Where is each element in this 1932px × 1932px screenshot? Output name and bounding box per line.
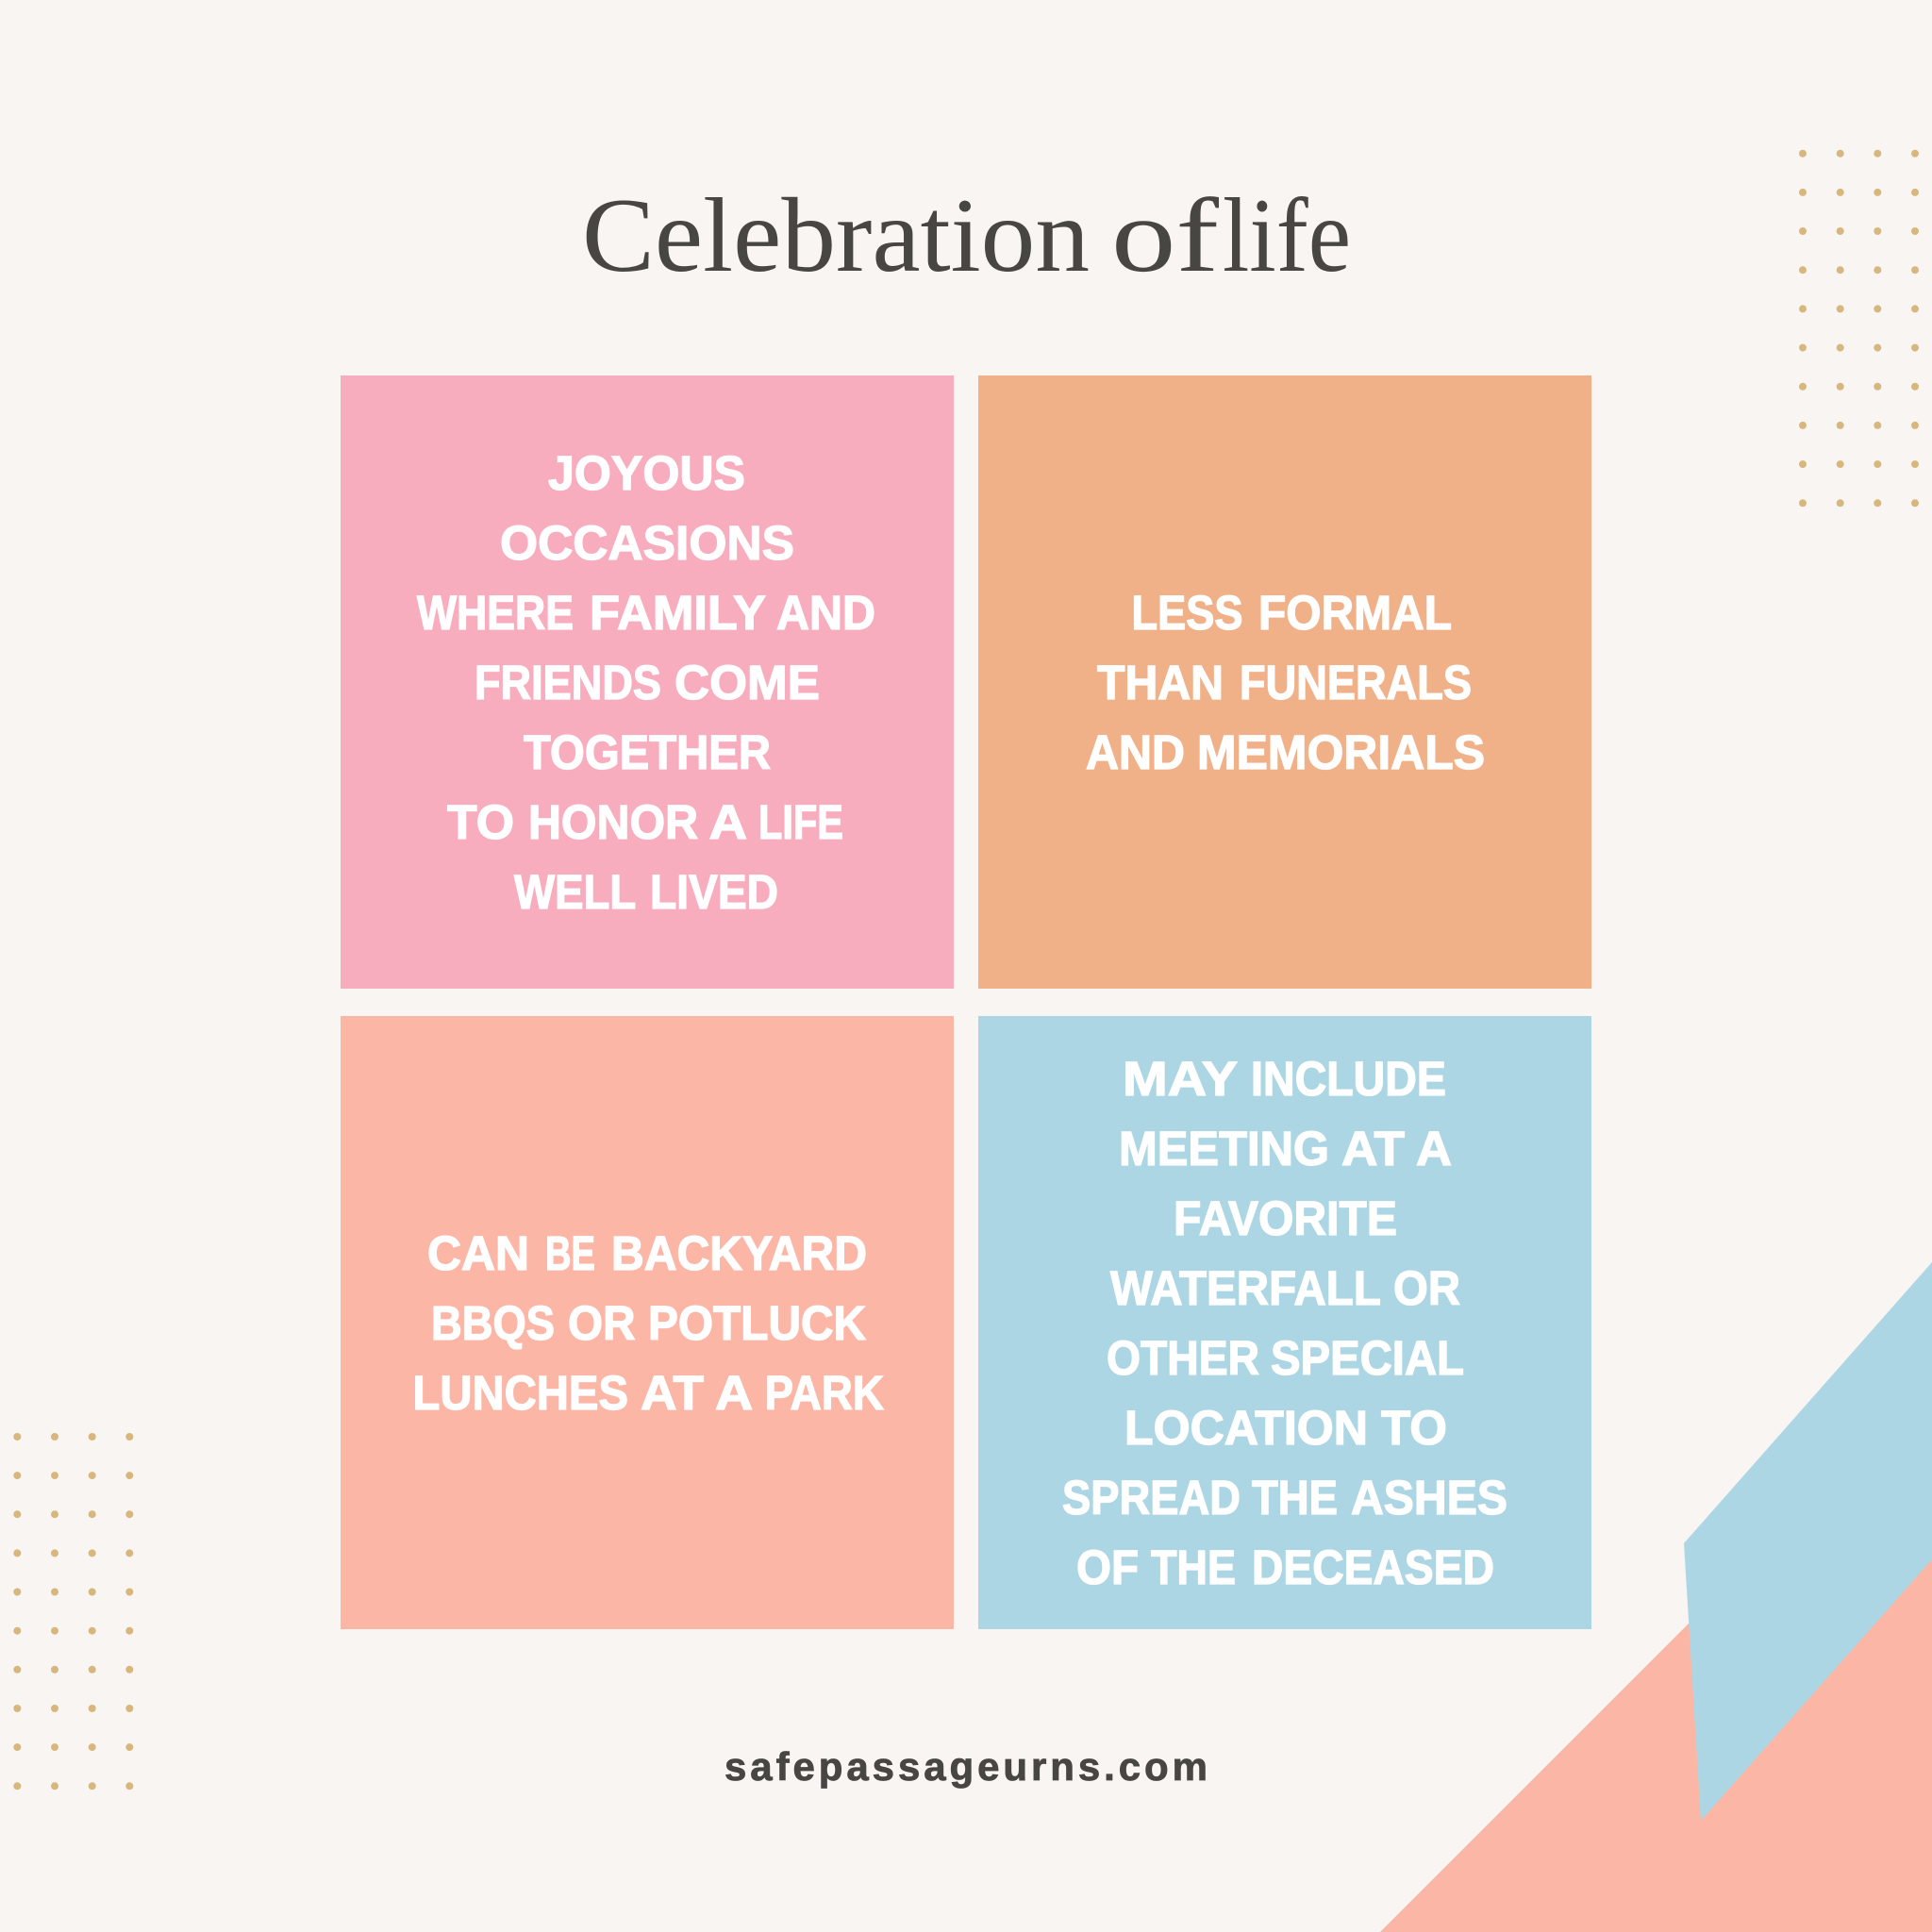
panel: backyard bbqs: PARK (764, 1366, 884, 1420)
panel: backyard bbqs: POTLUCK (648, 1296, 866, 1350)
panel: backyard bbqs: OR (568, 1296, 636, 1350)
panel: less formal: THAN (1097, 656, 1224, 709)
panel: special location: SPECIAL (1271, 1331, 1464, 1385)
panel: joyous occasions: TO (447, 795, 514, 849)
panel: joyous occasions: AND (776, 586, 875, 640)
panel: joyous occasions: LIVED (650, 865, 778, 919)
title: life (1223, 177, 1351, 294)
panel: special location (978, 1016, 1591, 1629)
panel: special location: OF (1076, 1541, 1139, 1594)
panel: backyard bbqs: BBQS (431, 1296, 555, 1350)
panel: special location: MAY (1123, 1052, 1238, 1106)
panel: less formal: FORMAL (1258, 586, 1452, 640)
panel: joyous occasions: FRIENDS (475, 656, 661, 709)
panel: less formal: MEMORIALS (1197, 725, 1485, 779)
panel: joyous occasions: COME (675, 656, 820, 709)
panel: special location: INCLUDE (1251, 1052, 1446, 1106)
panel: special location: ASHES (1351, 1471, 1507, 1524)
panel: joyous occasions: A (709, 795, 746, 849)
panel: backyard bbqs: CAN (427, 1226, 529, 1280)
panel: backyard bbqs: A (715, 1366, 752, 1420)
panel: less formal: LESS (1132, 586, 1243, 640)
panel: joyous occasions: TOGETHER (524, 725, 771, 779)
panel: special location: DECEASED (1252, 1541, 1494, 1594)
panel: backyard bbqs: BACKYARD (611, 1226, 867, 1280)
dot grid, top right (1799, 150, 1919, 507)
panel: special location: FAVORITE (1174, 1191, 1397, 1245)
panel: special location: THE (1151, 1541, 1236, 1594)
panel: special location: A (1416, 1122, 1452, 1175)
footer website: safepassageurns.com (724, 1744, 1208, 1789)
panel: joyous occasions: FAMILY (590, 586, 766, 640)
panel: backyard bbqs: LUNCHES (413, 1366, 628, 1420)
title: Celebration (582, 177, 1090, 294)
panel: special location: MEETING (1119, 1122, 1329, 1175)
panel: special location: SPREAD (1062, 1471, 1241, 1524)
panel: special location: TO (1381, 1401, 1447, 1455)
decorative blue parallelogram, bottom right (1684, 1262, 1932, 1821)
panel: joyous occasions: WHERE (417, 586, 574, 640)
panel: joyous occasions (341, 375, 954, 989)
panel: special location: AT (1341, 1122, 1405, 1175)
panel: less formal: FUNERALS (1240, 656, 1472, 709)
panel: backyard bbqs (341, 1016, 954, 1629)
decorative salmon triangle, bottom right (1380, 1380, 1932, 1932)
panel: joyous occasions: OCCASIONS (500, 516, 794, 570)
panel: special location: LOCATION (1124, 1401, 1368, 1455)
panel: joyous occasions: HONOR (528, 795, 698, 849)
panel: joyous occasions: WELL (514, 865, 636, 919)
panel: special location: OR (1393, 1261, 1460, 1315)
dot grid, bottom left (13, 1433, 133, 1790)
panel: joyous occasions: JOYOUS (548, 446, 745, 500)
panel: special location: THE (1252, 1471, 1338, 1524)
panel: backyard bbqs: AT (641, 1366, 704, 1420)
panel: joyous occasions: LIFE (758, 795, 843, 849)
panel: backyard bbqs: BE (545, 1226, 595, 1280)
panel: special location: OTHER (1107, 1331, 1259, 1385)
title: of (1111, 177, 1220, 294)
panel: less formal (978, 375, 1591, 989)
panel: less formal: AND (1086, 725, 1185, 779)
panel: special location: WATERFALL (1110, 1261, 1380, 1315)
